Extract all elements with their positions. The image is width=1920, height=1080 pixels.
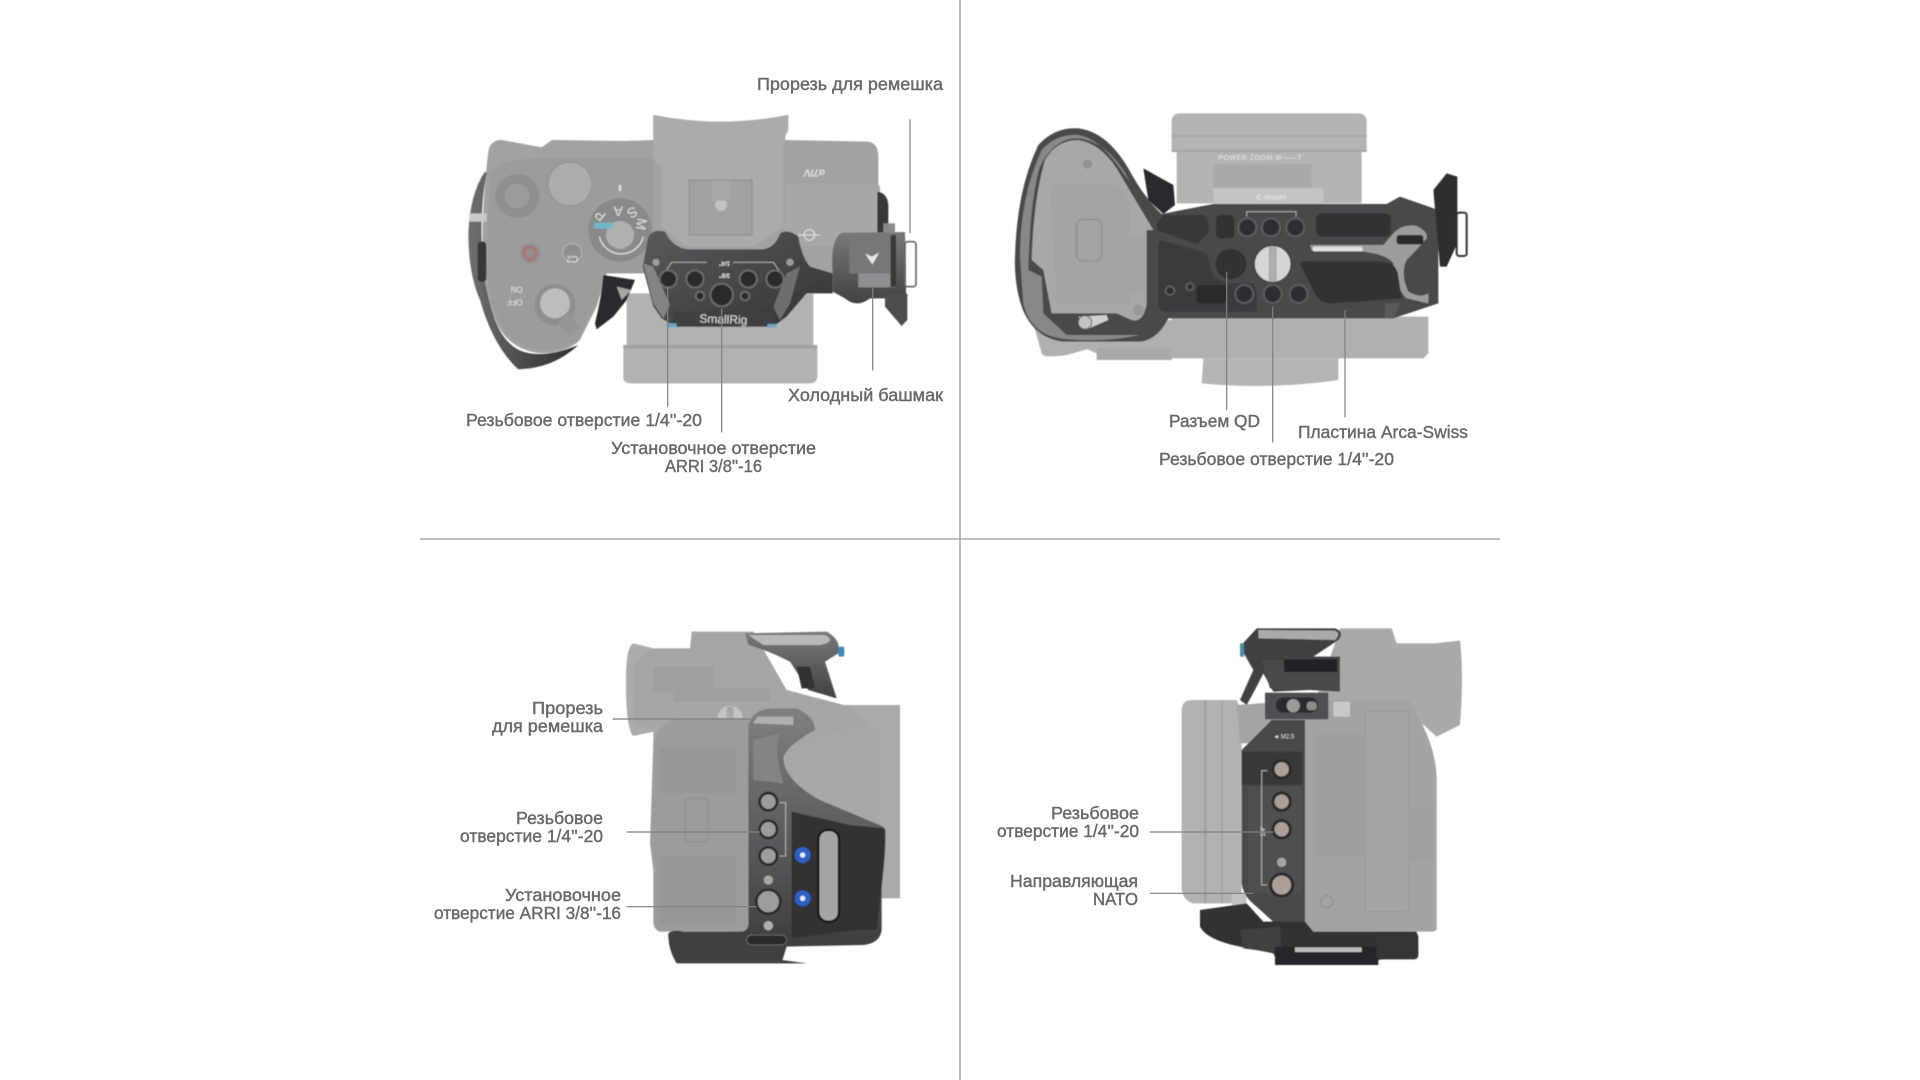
foot [668, 931, 787, 963]
bracket mark [1247, 212, 1296, 217]
camera body [1303, 700, 1437, 932]
lens barrel [1172, 113, 1367, 203]
switch labels: ON [510, 285, 523, 294]
mount text: E-mount [1257, 194, 1286, 201]
threaded holes [1166, 218, 1308, 303]
cold shoe [832, 232, 906, 303]
label: threaded hole right [997, 803, 1139, 841]
panel: left side view of cage [613, 632, 900, 963]
dial front [548, 162, 592, 206]
label: threaded hole left: отверстие 1/4''-20 [460, 826, 603, 846]
plate panels [1157, 215, 1209, 244]
leader lines [1227, 272, 1345, 443]
plate bracket [662, 262, 783, 277]
label: threaded hole right: Резьбовое [1051, 803, 1139, 823]
camera body [482, 115, 878, 353]
grip rail [468, 172, 578, 369]
illustration: camera side with NATO rail [1182, 628, 1462, 965]
label: threaded hole top: Резьбовое отверстие 1/4''-20 [466, 410, 702, 430]
cage outer frame [1015, 128, 1438, 342]
hot shoe [689, 180, 752, 235]
mode letters: A [613, 204, 623, 220]
leader lines [613, 719, 760, 907]
strap loop [905, 242, 916, 287]
mode letters: P [591, 206, 609, 225]
label: ARRI hole top [611, 438, 816, 476]
mode dial [588, 198, 652, 262]
lens collar [1237, 700, 1310, 743]
dial rear [495, 174, 539, 218]
threaded holes [756, 793, 780, 914]
label: strap slot side: для ремешка [492, 716, 603, 736]
label: NATO rail: NATO [1093, 889, 1138, 909]
grip body right [783, 730, 883, 897]
thumb wedge [595, 275, 635, 329]
top plate shade [487, 158, 653, 350]
label: strap slot side [492, 698, 603, 736]
top wedge [745, 632, 839, 698]
label: Arca-Swiss plate: Пластина Arca-Swiss [1298, 422, 1468, 442]
label: cold shoe: Холодный башмак [788, 385, 943, 405]
cage side plate [668, 708, 885, 963]
right dark block [877, 192, 888, 233]
flat line marker [804, 230, 815, 240]
illustration: camera side with grip [626, 632, 900, 963]
plate mark 1/4: 1/4" [1261, 826, 1267, 837]
label: threaded hole bottom: Резьбовое отверстие 1/4''-20 [1159, 449, 1394, 469]
wedge top [1143, 168, 1175, 214]
panel: top view of camera cage [468, 115, 916, 433]
threaded holes [1271, 761, 1293, 896]
label: NATO rail: Направляющая [1010, 871, 1138, 891]
plate mark 3/8: 3/8" [719, 271, 730, 277]
bracket mark [779, 803, 786, 856]
mode letters: S [624, 203, 641, 222]
bracket mark [1262, 771, 1267, 885]
eyecup [626, 643, 653, 736]
illustration: camera top with cage [468, 115, 916, 383]
C2 label: C2 [566, 254, 578, 264]
upper housing [633, 632, 870, 817]
eyepiece housing [1313, 628, 1462, 737]
label: threaded hole left [460, 808, 603, 846]
shoe wedge [885, 293, 907, 326]
shoe clamp [1265, 693, 1328, 719]
power switch [534, 284, 576, 326]
panel: right side view of cage [1150, 628, 1462, 965]
record button [520, 243, 540, 263]
threaded holes [660, 270, 784, 306]
C2 button [563, 243, 582, 262]
divider: horizontal [420, 538, 1500, 540]
center screw [1254, 246, 1291, 282]
label: threaded hole left: Резьбовое [516, 808, 603, 828]
battery door [1032, 140, 1153, 320]
top wedge [1240, 628, 1341, 705]
label: ARRI hole left [434, 885, 621, 923]
blue screws [795, 847, 811, 906]
label: ARRI hole top: ARRI 3/8''-16 [665, 456, 762, 476]
top plate [643, 231, 833, 327]
leader lines [668, 119, 910, 433]
label: ARRI hole left: Установочное [505, 885, 621, 905]
label: NATO rail [1010, 871, 1138, 909]
rear lens [837, 705, 900, 903]
leader lines [1150, 832, 1273, 893]
strap slot [1313, 247, 1363, 251]
brand name: SmallRig [699, 311, 748, 327]
eyecup [1202, 358, 1338, 386]
label: ARRI hole top: Установочное отверстие [611, 438, 816, 458]
side plate [1242, 720, 1305, 927]
front lens [1182, 700, 1242, 903]
label: strap slot side: Прорезь [532, 698, 603, 718]
panel: bottom view of camera cage [1015, 113, 1467, 443]
viewfinder block [653, 115, 788, 247]
label: QD socket: Разъем QD [1169, 411, 1260, 431]
grip rubber [792, 812, 885, 938]
latch screw [1078, 315, 1108, 329]
grip slot [818, 830, 839, 922]
label: strap slot top: Прорезь для ремешка [757, 74, 943, 94]
illustration: camera base with cage [1015, 113, 1467, 386]
divider: vertical [959, 0, 961, 1080]
mode letters: M [633, 217, 650, 231]
mode letters [591, 203, 650, 231]
label: threaded hole right: отверстие 1/4''-20 [997, 821, 1139, 841]
body back [650, 718, 748, 932]
QD socket [1216, 249, 1246, 279]
camera underside [1033, 317, 1428, 358]
model badge: α7IV [802, 166, 825, 177]
switch labels off: OFF [507, 297, 523, 306]
lens block [623, 293, 817, 383]
shoe knob [717, 706, 743, 731]
base plate [1200, 903, 1418, 960]
arca slot [1310, 225, 1428, 303]
plate mark 1/4: 1/4" [719, 259, 730, 265]
strap loop right [1433, 173, 1457, 267]
label: ARRI hole left: отверстие ARRI 3/8''-16 [434, 903, 621, 923]
plate mark M2.5: ◄ M2.5 [1273, 735, 1295, 741]
lens text: POWER ZOOM W——T [1218, 155, 1302, 162]
